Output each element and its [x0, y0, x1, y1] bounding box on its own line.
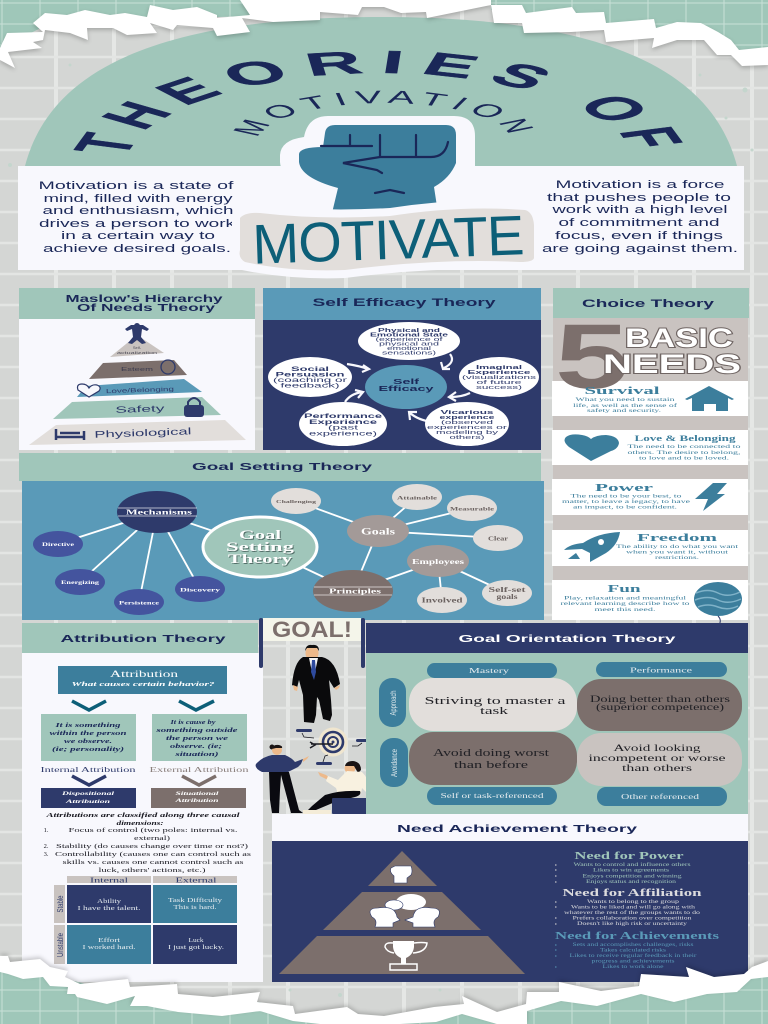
- need: fun: relevant learning describe how to: [560, 601, 690, 607]
- box: dispositional: [41, 788, 136, 808]
- need: power: Power: [595, 482, 653, 494]
- icon: rocket: [564, 532, 620, 562]
- table: attribution matrix: External: [176, 876, 216, 884]
- node: principles: [313, 570, 393, 612]
- node: discovery: [175, 576, 225, 602]
- need: love and belonging: Love & Belonging: [634, 434, 736, 443]
- intro text right: work with a high level: [551, 204, 728, 216]
- node: goal setting theory: [203, 517, 317, 577]
- pyramid tier: love: [77, 379, 202, 397]
- box: external description: It is cause by: [169, 719, 216, 726]
- text: causal dimensions: skills vs. causes one cannot control such as: [62, 859, 244, 866]
- node: principles: Principles: [329, 586, 381, 596]
- icon: heart: [565, 434, 619, 461]
- heading: maslow: Maslow's Hierarchy: [66, 294, 223, 305]
- panel: goal orientation theory: [366, 623, 748, 814]
- heading: goal setting: Goal Setting Theory: [192, 461, 372, 473]
- connectors: [58, 497, 507, 602]
- panel: need achievement theory: [272, 814, 748, 982]
- heading: self efficacy: Self Efficacy Theory: [312, 297, 497, 309]
- table: attribution matrix: I worked hard.: [82, 945, 136, 951]
- title: theories of: THEORIES OF: [73, 50, 683, 152]
- intro text right: of commitment and: [558, 217, 720, 229]
- pyramid tier: safety: Safety: [115, 403, 166, 415]
- node: goals: Goals: [361, 526, 396, 536]
- text: need for achievements: Likes to receive regular feedback in their: [570, 952, 697, 959]
- illustration: people and goal: [256, 617, 378, 814]
- node: mechanisms: Mechanisms: [126, 508, 192, 516]
- need: survival: What you need to sustain: [576, 397, 675, 403]
- heading: goal setting: [19, 453, 541, 481]
- pyramid tier: esteem: Esteem: [121, 367, 154, 373]
- table: attribution matrix: Stable: [56, 895, 65, 912]
- node: energizing: [55, 569, 105, 595]
- table: attribution matrix: Luck: [188, 938, 204, 944]
- factor: social persuasion: [268, 357, 352, 397]
- factor: vicarious experience: Vicarious: [440, 410, 494, 416]
- box: external description: something outside: [155, 727, 238, 734]
- box: external description: the person we: [166, 735, 228, 742]
- icon: house: [685, 386, 734, 411]
- node: discovery: Discovery: [180, 588, 220, 594]
- pill: other referenced: Other referenced: [621, 793, 700, 801]
- table: attribution matrix: I have the talent.: [78, 906, 141, 912]
- need: freedom: when you want it, without: [626, 550, 729, 556]
- node: attainable: Attainable: [397, 496, 438, 502]
- need: love and belonging: others. The desire to belong,: [628, 450, 742, 456]
- heading: maslow: Of Needs Theory: [77, 303, 216, 314]
- figure: businessman: [292, 645, 340, 723]
- pyramid tier: self-actualization: Self-: [133, 345, 142, 350]
- cell: doing better: [577, 679, 742, 731]
- table: attribution matrix: [54, 876, 237, 964]
- sign: goal: [259, 617, 365, 668]
- heading: basic needs: NEEDS: [603, 349, 741, 379]
- intro text left: and enthusiasm, which: [42, 205, 234, 217]
- table: attribution matrix: Internal: [90, 876, 128, 884]
- need: power: an impact, to be confident.: [573, 504, 678, 510]
- text: causal dimensions: [44, 812, 252, 874]
- factor: physical and emotional state: Physical and: [378, 328, 440, 334]
- factor: vicarious experience: others): [450, 435, 485, 441]
- figure: seated woman: [303, 761, 378, 814]
- need: survival: life, as well as the sense of: [573, 402, 677, 409]
- cell: avoid looking incompetent: incompetent or worse: [588, 754, 726, 764]
- box: external description: observe. (ie;: [170, 743, 222, 750]
- intro text left: [38, 180, 236, 255]
- torn paper top edge: [0, 0, 768, 68]
- node: measurable: [447, 495, 497, 521]
- heading: goal orientation: [366, 623, 748, 653]
- text: causal dimensions: Focus of control (two poles: internal vs.: [68, 827, 238, 834]
- factor: imaginal experience: (visualizations: [462, 375, 536, 381]
- text: need for power: Need for Power: [574, 851, 684, 862]
- node: self-set goals: Self-set: [488, 586, 527, 594]
- box: internal description: It is something: [54, 722, 122, 729]
- pill: mastery: Mastery: [469, 667, 510, 675]
- box: attribution question: Attribution: [110, 669, 179, 679]
- factor: vicarious experience: experience: [440, 415, 496, 421]
- factor: imaginal experience: [459, 357, 539, 397]
- cell: doing better: Doing better than others: [590, 694, 731, 704]
- arrow: external chevron: [182, 776, 216, 785]
- cell: striving to master: Striving to master a: [424, 696, 566, 707]
- node: goal setting theory: Theory: [228, 552, 293, 566]
- factor: social persuasion: (coaching or: [273, 377, 347, 384]
- text: need for affiliation: Wants to be liked and will go along with: [571, 904, 696, 910]
- factor: imaginal experience: success): [476, 385, 522, 391]
- cell: avoid looking incompetent: [577, 733, 742, 786]
- node: directive: Directive: [42, 542, 75, 548]
- factor: performance experience: Experience: [309, 419, 378, 426]
- cell: doing better: (superior competence): [596, 702, 724, 712]
- intro text right: are going against them.: [542, 243, 738, 255]
- arrow: internal chevron: [72, 776, 106, 785]
- sign: goal: GOAL!: [272, 617, 352, 642]
- table: attribution matrix: This is hard.: [174, 905, 217, 911]
- node: employees: Employees: [412, 558, 464, 566]
- big number five: 5: [555, 306, 629, 408]
- node: goal setting theory: Setting: [226, 540, 295, 554]
- node: employees: [407, 545, 469, 577]
- text: need for power: Enjoys competition and winning: [582, 874, 682, 880]
- node: goals: [347, 515, 409, 547]
- factor: performance experience: (past: [328, 424, 359, 432]
- cell: avoid doing worst: than before: [454, 760, 529, 771]
- arrows between factors: [345, 354, 470, 422]
- need: freedom: restrictions.: [655, 555, 700, 561]
- intro text left: achieve desired goals.: [43, 243, 231, 255]
- node: clear: Clear: [488, 536, 508, 542]
- factor: vicarious experience: experiences or: [427, 425, 507, 431]
- node: attainable: [392, 484, 442, 510]
- heading: choice theory: [553, 288, 749, 318]
- banner: motivate: MOTIVATE: [251, 203, 525, 276]
- box: external description: situation): [174, 751, 218, 758]
- text: causal dimensions: 1.: [44, 827, 49, 834]
- text: causal dimensions: luck, others' actions, etc.): [98, 867, 206, 874]
- factor: physical and emotional state: physical and: [379, 342, 439, 348]
- text: need for power: [555, 851, 690, 885]
- box: attribution question: [58, 666, 227, 694]
- icon: target with callouts: [296, 728, 372, 765]
- need: power: The need to be your best, to: [570, 494, 682, 500]
- pill: avoidance: [380, 738, 408, 787]
- heading: maslow: [19, 288, 255, 319]
- table: attribution matrix: Unstable: [56, 933, 65, 957]
- need: power: matter, to leave a legacy, to have: [562, 499, 691, 505]
- center: self efficacy: Self: [393, 377, 420, 386]
- pyramid tier: power: [368, 851, 437, 886]
- box: situational: [151, 788, 246, 808]
- intro text right: that pushes people to: [547, 192, 731, 204]
- node: clear: [473, 525, 523, 551]
- factor: vicarious experience: [425, 402, 509, 446]
- factor: social persuasion: feedback): [280, 382, 340, 390]
- factor: performance experience: experience): [309, 430, 377, 438]
- pyramid tier: love: Love/Belonging: [106, 387, 174, 395]
- factor: vicarious experience: modeling by: [436, 430, 498, 436]
- cell: striving to master: [409, 678, 577, 731]
- panel: choice theory: [552, 288, 749, 625]
- text: causal dimensions: external): [134, 835, 170, 842]
- text: need for power: Likes to win agreements: [593, 868, 669, 874]
- need: power: [552, 479, 748, 515]
- factor: social persuasion: Social: [291, 366, 330, 373]
- heading: basic needs: BASIC: [625, 323, 733, 353]
- box: internal description: within the person: [50, 730, 127, 737]
- center: self efficacy: [365, 365, 447, 409]
- need: fun: Fun: [608, 583, 640, 595]
- intro white band: [18, 166, 744, 270]
- subtitle: motivation: MOTIVATION: [234, 90, 534, 136]
- pill: mastery: [427, 663, 557, 678]
- text: causal dimensions: Attributions are classified along three causal: [45, 812, 240, 819]
- node: goal setting theory: Goal: [239, 528, 282, 542]
- table: attribution matrix: I just got lucky.: [168, 945, 225, 951]
- pyramid tier: physiological: [29, 420, 246, 445]
- intro text right: [542, 179, 738, 255]
- need: survival: Survival: [584, 385, 660, 397]
- pill: performance: [596, 662, 727, 677]
- node: energizing: Energizing: [61, 580, 99, 586]
- need: fun: [552, 580, 748, 625]
- label: external attribution: External Attribution: [150, 766, 249, 774]
- need: love and belonging: to love and to be loved.: [639, 456, 730, 462]
- box: internal description: we observe.: [64, 738, 113, 745]
- heading: self efficacy: [263, 288, 541, 320]
- pyramid tier: affiliation: [323, 892, 481, 930]
- pill: other referenced: [597, 787, 727, 806]
- pyramid tier: physiological: Physiological: [94, 426, 192, 441]
- text: causal dimensions: 3.: [44, 851, 49, 858]
- intro text left: Motivation is a state of: [38, 180, 235, 192]
- icon: balloon: [694, 582, 742, 625]
- intro text right: focus, even if things: [555, 230, 724, 242]
- need: fun: meet this need.: [594, 607, 657, 613]
- cell: avoid doing worst: Avoid doing worst: [433, 748, 549, 759]
- panel: goal setting theory: [19, 453, 544, 620]
- icon: raised fist with halo: [280, 116, 475, 222]
- text: need for achievements: Need for Achievements: [555, 930, 720, 942]
- node: challenging: [271, 488, 321, 514]
- table: attribution matrix: Ability: [97, 899, 121, 905]
- text: causal dimensions: 2.: [44, 843, 49, 850]
- node: involved: [417, 587, 467, 613]
- box: attribution question: What causes certain behavior?: [72, 681, 216, 688]
- intro text left: mind, filled with energy: [44, 193, 233, 205]
- center: self efficacy: Efficacy: [378, 384, 435, 393]
- label: internal attribution: Internal Attribution: [40, 766, 136, 774]
- cell: avoid doing worst: [409, 732, 577, 785]
- text: causal dimensions: dimensions:: [116, 820, 164, 827]
- pill: approach: Approach: [389, 690, 398, 716]
- box: dispositional: Attribution: [64, 799, 110, 805]
- text: need for affiliation: whatever the rest of the groups wants to do: [564, 909, 701, 916]
- intro text left: drives a person to work: [39, 218, 236, 230]
- factor: vicarious experience: (observed: [441, 420, 493, 426]
- heading: basic needs: [603, 323, 741, 379]
- need: survival: safety and security.: [587, 407, 662, 414]
- pill: performance: Performance: [630, 666, 692, 674]
- box: internal description: (ie; personality): [52, 746, 124, 753]
- node: persistence: [114, 589, 164, 615]
- heading: goal orientation: Goal Orientation Theory: [458, 634, 676, 645]
- box: dispositional: Dispositional: [60, 791, 115, 797]
- factor: performance experience: Performance: [304, 413, 383, 420]
- text: need for affiliation: Doesn't like high risk or uncertainty: [577, 921, 688, 927]
- node: measurable: Measurable: [450, 508, 495, 512]
- pill: avoidance: Avoidance: [390, 749, 399, 777]
- text: need for affiliation: Wants to belong to the group: [587, 899, 680, 905]
- text: need for achievements: Likes to work alone: [602, 964, 665, 970]
- intro text right: Motivation is a force: [556, 179, 724, 191]
- pyramid tier: esteem: [89, 360, 187, 379]
- factor: performance experience: [299, 402, 387, 446]
- intro text left: in a certain way to: [61, 230, 215, 242]
- need: love and belonging: [552, 430, 748, 465]
- node: self-set goals: [482, 580, 532, 606]
- icon: lightning bolt: [695, 483, 727, 511]
- factor: imaginal experience: Imaginal: [476, 365, 523, 371]
- text: need for achievements: Sets and accomplishes challenges, risks: [572, 942, 694, 948]
- top mint corner left: [0, 0, 250, 48]
- torn paper bottom edge: [0, 956, 768, 1024]
- box: situational: Situational: [176, 791, 219, 797]
- table: attribution matrix: Task Difficulty: [168, 897, 222, 904]
- table: attribution matrix: Effort: [98, 937, 121, 944]
- need: fun: Play, relaxation and meaningful: [564, 594, 687, 602]
- heading: attribution: Attribution Theory: [60, 633, 226, 645]
- figure: standing woman: [256, 744, 309, 813]
- box: external description: [152, 714, 247, 761]
- text: causal dimensions: Controllability (causes one can control such as: [55, 851, 252, 858]
- pill: self or task-referenced: [427, 787, 557, 805]
- pyramid tier: self-actualization: [110, 335, 164, 357]
- factor: physical and emotional state: [358, 322, 460, 360]
- factor: physical and emotional state: sensations): [382, 350, 436, 356]
- pill: approach: [379, 678, 406, 727]
- need: survival: [573, 385, 734, 414]
- dome heading background: [25, 17, 737, 166]
- cell: avoid looking incompetent: Avoid looking: [614, 744, 701, 754]
- text: need for affiliation: Prefers collaboration over competition: [572, 914, 692, 922]
- panel: self efficacy: [263, 288, 541, 450]
- text: need for power: Enjoys status and recognition: [586, 879, 677, 885]
- text: need for power: Wants to control and influence others: [574, 861, 690, 868]
- text: need for affiliation: Need for Affiliation: [562, 887, 702, 899]
- node: self-set goals: goals: [496, 593, 518, 601]
- need: freedom: Freedom: [637, 532, 717, 544]
- node: directive: [33, 531, 83, 557]
- node: involved: Involved: [422, 596, 463, 604]
- factor: physical and emotional state: Emotional State: [370, 332, 448, 338]
- node: mechanisms: [117, 491, 197, 533]
- box: situational: Attribution: [174, 798, 218, 804]
- pyramid tier: safety: [53, 397, 221, 419]
- heading: need achievement: Need Achievement Theory: [397, 823, 637, 835]
- heading: choice theory: Choice Theory: [582, 298, 716, 310]
- box: internal description: [41, 714, 136, 761]
- need: love and belonging: The need to be connected to: [628, 444, 741, 450]
- panel: maslow: [19, 288, 255, 450]
- text: need for affiliation: [555, 887, 702, 927]
- text: need for achievements: [555, 930, 720, 970]
- pyramid tier: self-actualization: actualization: [117, 350, 157, 355]
- factor: social persuasion: Persuasion: [276, 372, 345, 378]
- heading: attribution: [22, 623, 258, 653]
- cell: avoid looking incompetent: than others: [622, 764, 692, 774]
- factor: physical and emotional state: (experience of: [376, 337, 444, 343]
- factor: physical and emotional state: emotional: [387, 346, 431, 352]
- need: freedom: The ability to do what you want: [616, 544, 739, 550]
- pyramid tier: achievements: [279, 936, 525, 974]
- panel: attribution theory: [22, 623, 263, 982]
- factor: imaginal experience: Experience: [468, 370, 532, 376]
- text: need for achievements: Takes calculated risks: [600, 948, 666, 954]
- text: causal dimensions: Stability (do causes change over time or not?): [56, 843, 248, 850]
- icon: person on top: [125, 323, 149, 344]
- node: challenging: Challenging: [276, 499, 317, 504]
- pill: self or task-referenced: Self or task-referenced: [440, 792, 544, 800]
- factor: imaginal experience: of future: [476, 380, 522, 386]
- top mint corner right: [491, 0, 768, 56]
- arrows: teal chevrons: [72, 701, 214, 710]
- need: freedom: [552, 530, 748, 566]
- text: need for achievements: progress and achievements: [592, 958, 674, 964]
- node: persistence: Persistence: [119, 600, 160, 606]
- cell: striving to master: task: [480, 706, 509, 717]
